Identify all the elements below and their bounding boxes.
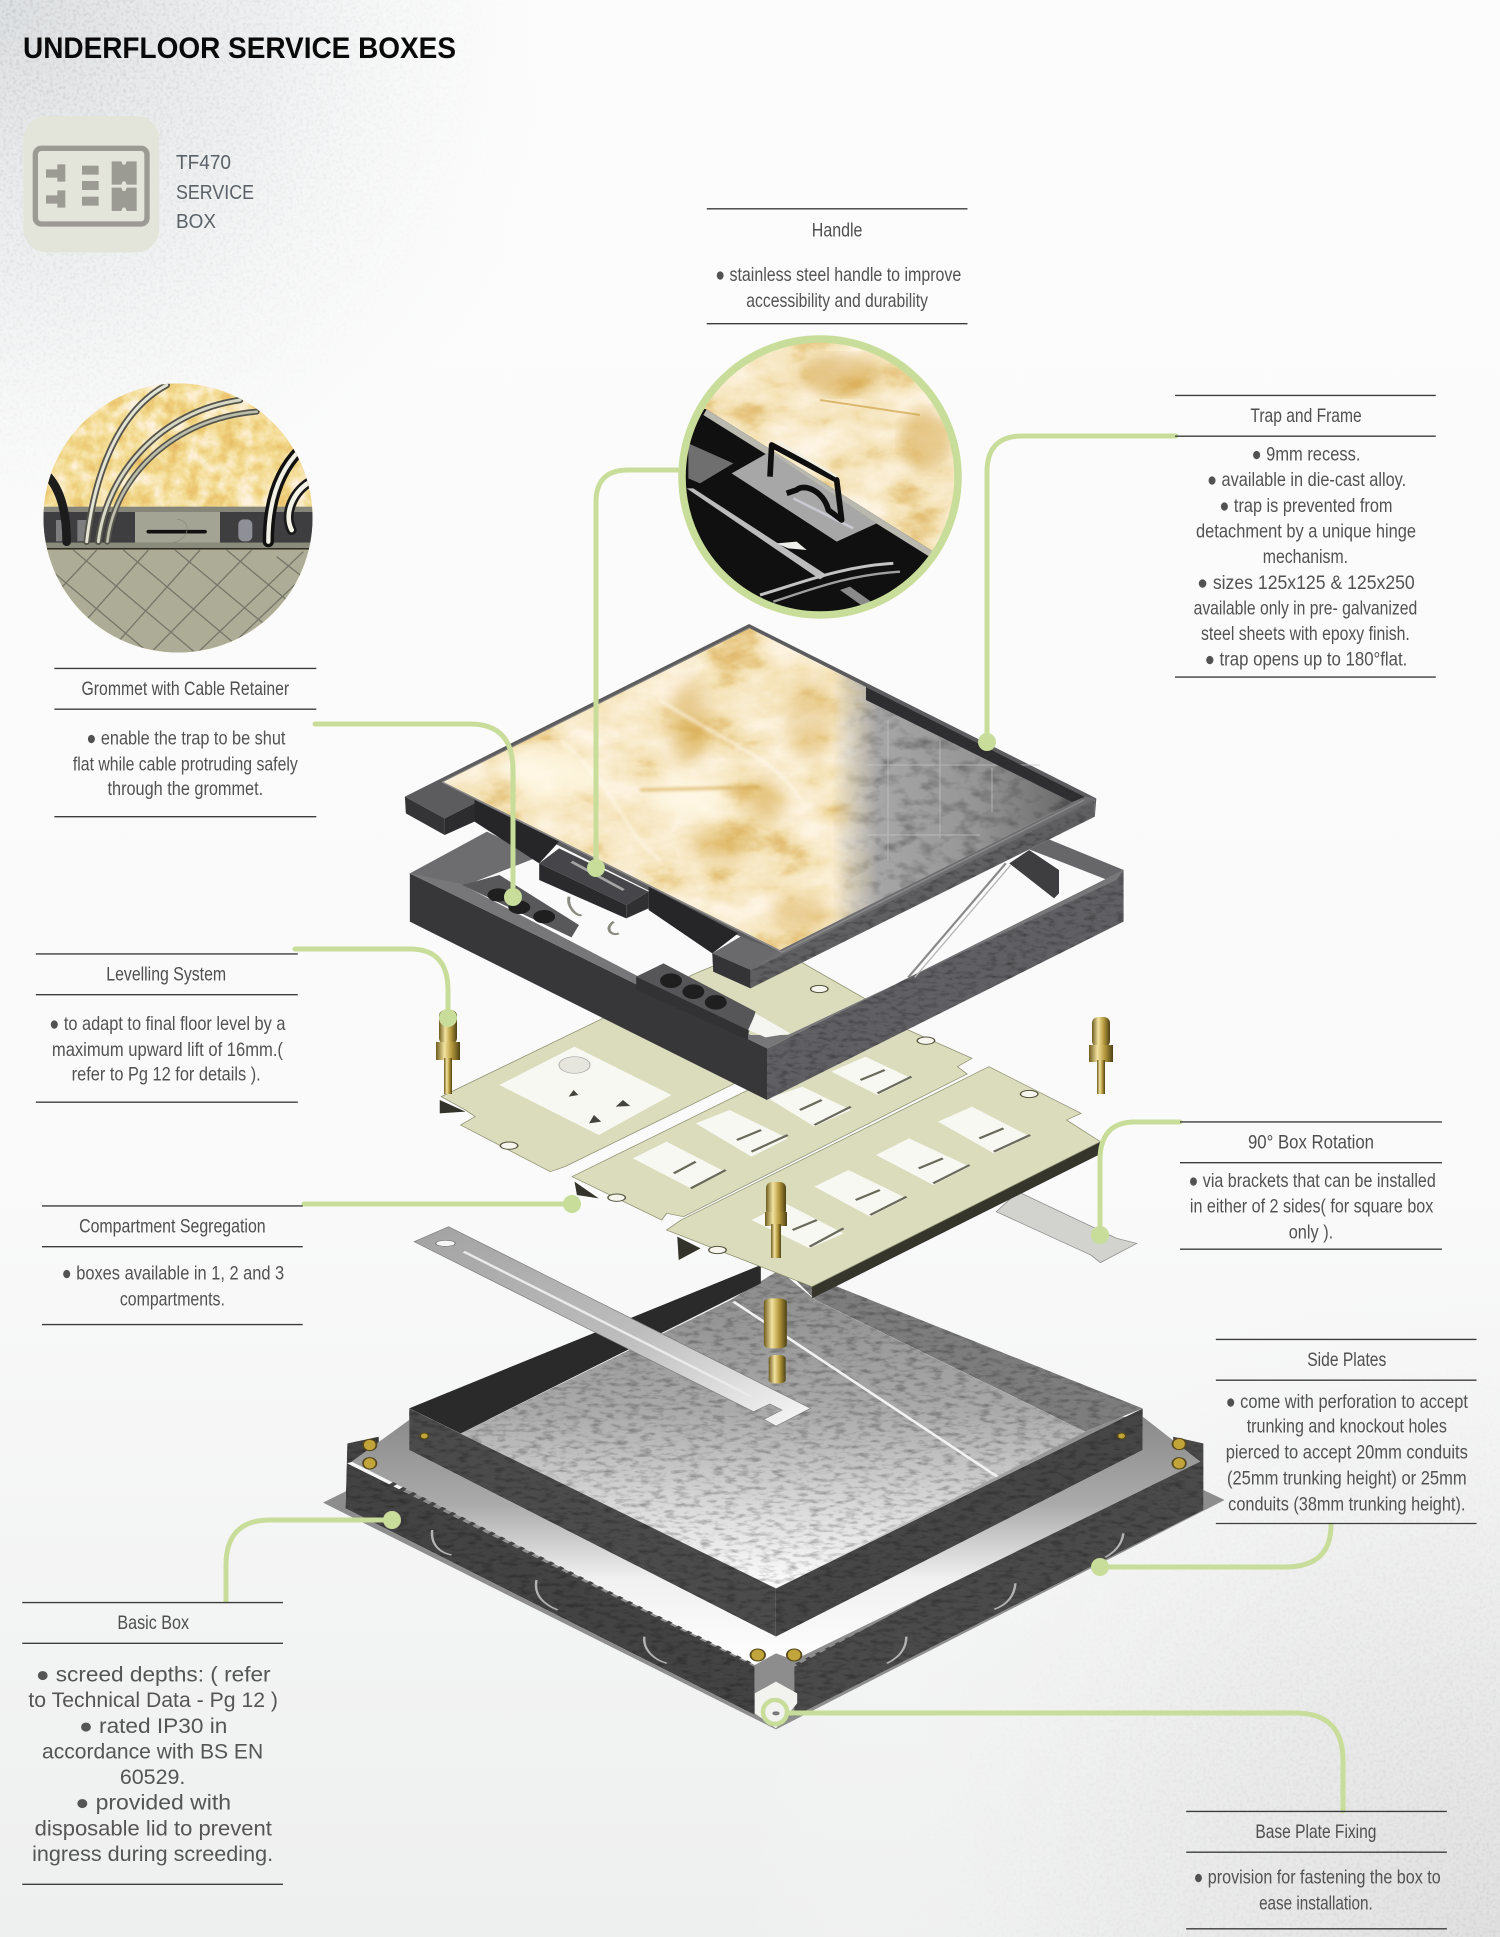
collar front left bbox=[409, 1408, 776, 1637]
callout: 90° Box Rotation: ● via brackets that can be installed bbox=[1189, 1171, 1436, 1192]
left lug bbox=[405, 797, 445, 835]
callout: Side Plates: pierced to accept 20mm conduits bbox=[1226, 1443, 1468, 1464]
fixing nuts bbox=[363, 1433, 1186, 1661]
single socket bbox=[499, 1047, 671, 1135]
callout: Levelling System: maximum upward lift of 16mm.( bbox=[52, 1040, 283, 1061]
right rim inner bbox=[751, 796, 1096, 970]
callout: Trap and Frame: ● sizes 125x125 & 125x250 bbox=[1197, 573, 1415, 594]
back-right inner wall bbox=[779, 1263, 1143, 1432]
callout: Trap and Frame: Trap and Frame bbox=[1250, 405, 1362, 427]
callout: Handle bbox=[707, 209, 967, 324]
callout: Basic Box: to Technical Data - Pg 12 ) bbox=[28, 1689, 278, 1712]
callout: Trap and Frame bbox=[1175, 395, 1436, 677]
callout: Side Plates: trunking and knockout holes bbox=[1247, 1417, 1447, 1438]
corner bracket bbox=[755, 1682, 797, 1728]
callout: Basic Box: 60529. bbox=[120, 1766, 185, 1789]
grommet block back bbox=[636, 963, 756, 1040]
collar front right bbox=[776, 1408, 1143, 1637]
detail circle: grommet with cables bbox=[40, 380, 320, 660]
callout: Trap and Frame: steel sheets with epoxy finish. bbox=[1201, 624, 1410, 645]
levelling screws bbox=[436, 1010, 1113, 1258]
flange perforations bbox=[391, 1483, 1161, 1665]
icon: service box bbox=[23, 116, 159, 252]
callout: Handle: Handle bbox=[812, 220, 862, 242]
lower sleeve bbox=[764, 1298, 787, 1383]
trap grid lines bbox=[868, 720, 1040, 860]
product label: TF470 bbox=[176, 152, 231, 174]
callout: 90° Box Rotation bbox=[1180, 1122, 1442, 1249]
right outer wall bbox=[794, 1437, 1203, 1717]
long bracket strip bbox=[414, 1227, 811, 1426]
callout: Trap and Frame: ● trap opens up to 180°flat. bbox=[1205, 649, 1407, 670]
frame back-left rim bbox=[410, 832, 539, 887]
trap body bbox=[405, 624, 1096, 988]
product label: BOX bbox=[176, 211, 216, 233]
callout: 90° Box Rotation: 90° Box Rotation bbox=[1248, 1131, 1374, 1153]
callout: Trap and Frame: ● 9mm recess. bbox=[1252, 444, 1360, 465]
callout: Base Plate Fixing: ease installation. bbox=[1259, 1894, 1373, 1915]
trap cover bbox=[405, 620, 1096, 988]
callout: Trap and Frame: mechanism. bbox=[1263, 547, 1348, 568]
trap grey underside bbox=[442, 628, 1084, 950]
right lug bbox=[712, 953, 751, 988]
callout: Compartment Segregation: Compartment Segregation bbox=[79, 1216, 266, 1238]
bracket strip bbox=[996, 1192, 1137, 1263]
slots bbox=[500, 985, 1038, 1254]
left outer wall bbox=[345, 1437, 755, 1715]
frame rim bbox=[410, 870, 1124, 1048]
knockouts bbox=[432, 1530, 1123, 1663]
callout: Grommet with Cable Retainer: through the grommet. bbox=[107, 779, 263, 800]
callout: Base Plate Fixing: Base Plate Fixing bbox=[1255, 1821, 1376, 1843]
callout: Handle: accessibility and durability bbox=[746, 291, 928, 312]
callout: 90° Box Rotation: in either of 2 sides( for square box bbox=[1190, 1197, 1434, 1218]
base box assembly bbox=[323, 1227, 1225, 1729]
callout: Base Plate Fixing: ● provision for fastening the box to bbox=[1194, 1868, 1441, 1889]
product label: SERVICE bbox=[176, 182, 254, 204]
callout: Trap and Frame: ● available in die-cast alloy. bbox=[1207, 470, 1406, 491]
callout: Grommet with Cable Retainer: Grommet with Cable Retainer bbox=[82, 678, 289, 700]
callout: Handle: ● stainless steel handle to improve bbox=[715, 265, 961, 286]
top flange bbox=[352, 1417, 1200, 1665]
callout: Trap and Frame: available only in pre- galvanized bbox=[1194, 599, 1417, 620]
frame left wall bbox=[410, 873, 767, 1100]
base plate flange bbox=[323, 1490, 1225, 1729]
grommet block left bbox=[462, 875, 579, 937]
callout: Compartment Segregation: compartments. bbox=[120, 1289, 225, 1310]
frame back-right rim bbox=[1027, 838, 1124, 883]
callout: Basic Box: ● screed depths: ( refer bbox=[36, 1664, 271, 1687]
callout: Grommet with Cable Retainer: flat while cable protruding safely bbox=[73, 754, 298, 775]
module sockets bbox=[633, 1057, 1030, 1248]
plate brackets bbox=[440, 1100, 701, 1260]
callout: Side Plates: (25mm trunking height) or 25mm bbox=[1227, 1469, 1467, 1490]
callout: Basic Box: Basic Box bbox=[117, 1612, 189, 1634]
plate 3 bbox=[812, 1142, 1100, 1298]
frame bbox=[410, 832, 1124, 1100]
handle block bbox=[539, 848, 649, 905]
callout: Grommet with Cable Retainer bbox=[54, 668, 316, 817]
callout: Basic Box: disposable lid to prevent bbox=[35, 1817, 272, 1840]
dark inner rim bbox=[866, 687, 1085, 802]
title: UNDERFLOOR SERVICE BOXES bbox=[23, 32, 456, 65]
product label bbox=[176, 152, 254, 233]
marble face bbox=[444, 628, 874, 950]
callout lines bbox=[226, 436, 1343, 1811]
callout: Side Plates bbox=[1216, 1339, 1477, 1523]
callout: Compartment Segregation: ● boxes available in 1, 2 and 3 bbox=[62, 1263, 284, 1284]
inner floor bbox=[461, 1270, 1085, 1588]
right bracket strip and plates bbox=[440, 943, 1137, 1298]
plate 1 bbox=[441, 943, 885, 1172]
callout: 90° Box Rotation: only ). bbox=[1289, 1223, 1333, 1244]
white corner bbox=[748, 1013, 790, 1037]
callout: Basic Box: ● rated IP30 in bbox=[79, 1715, 227, 1738]
callout: Levelling System: Levelling System bbox=[106, 963, 226, 985]
callout: Trap and Frame: ● trap is prevented from bbox=[1220, 496, 1393, 517]
frame right wall bbox=[767, 870, 1124, 1100]
callout: Basic Box: accordance with BS EN bbox=[42, 1740, 263, 1763]
callout: Levelling System: ● to adapt to final floor level by a bbox=[49, 1014, 286, 1035]
callout: Trap and Frame: detachment by a unique hinge bbox=[1196, 521, 1416, 542]
callout: Basic Box: ingress during screeding. bbox=[32, 1843, 273, 1866]
callout: Basic Box: ● provided with bbox=[75, 1792, 231, 1815]
tie rod bbox=[908, 863, 1006, 977]
plate 2 bbox=[572, 1022, 972, 1220]
callout: Levelling System: refer to Pg 12 for details ). bbox=[72, 1065, 261, 1086]
detail circle: handle bbox=[680, 337, 960, 620]
callout: Grommet with Cable Retainer: ● enable the trap to be shut bbox=[86, 728, 286, 749]
callout: Basic Box bbox=[22, 1603, 283, 1884]
callout: Levelling System bbox=[36, 954, 298, 1102]
under-trap dark band bbox=[475, 800, 559, 863]
callout: Compartment Segregation bbox=[42, 1206, 303, 1325]
back-left inner wall bbox=[409, 1265, 761, 1433]
callout: Base Plate Fixing bbox=[1186, 1811, 1447, 1929]
callout: Side Plates: Side Plates bbox=[1307, 1349, 1386, 1371]
